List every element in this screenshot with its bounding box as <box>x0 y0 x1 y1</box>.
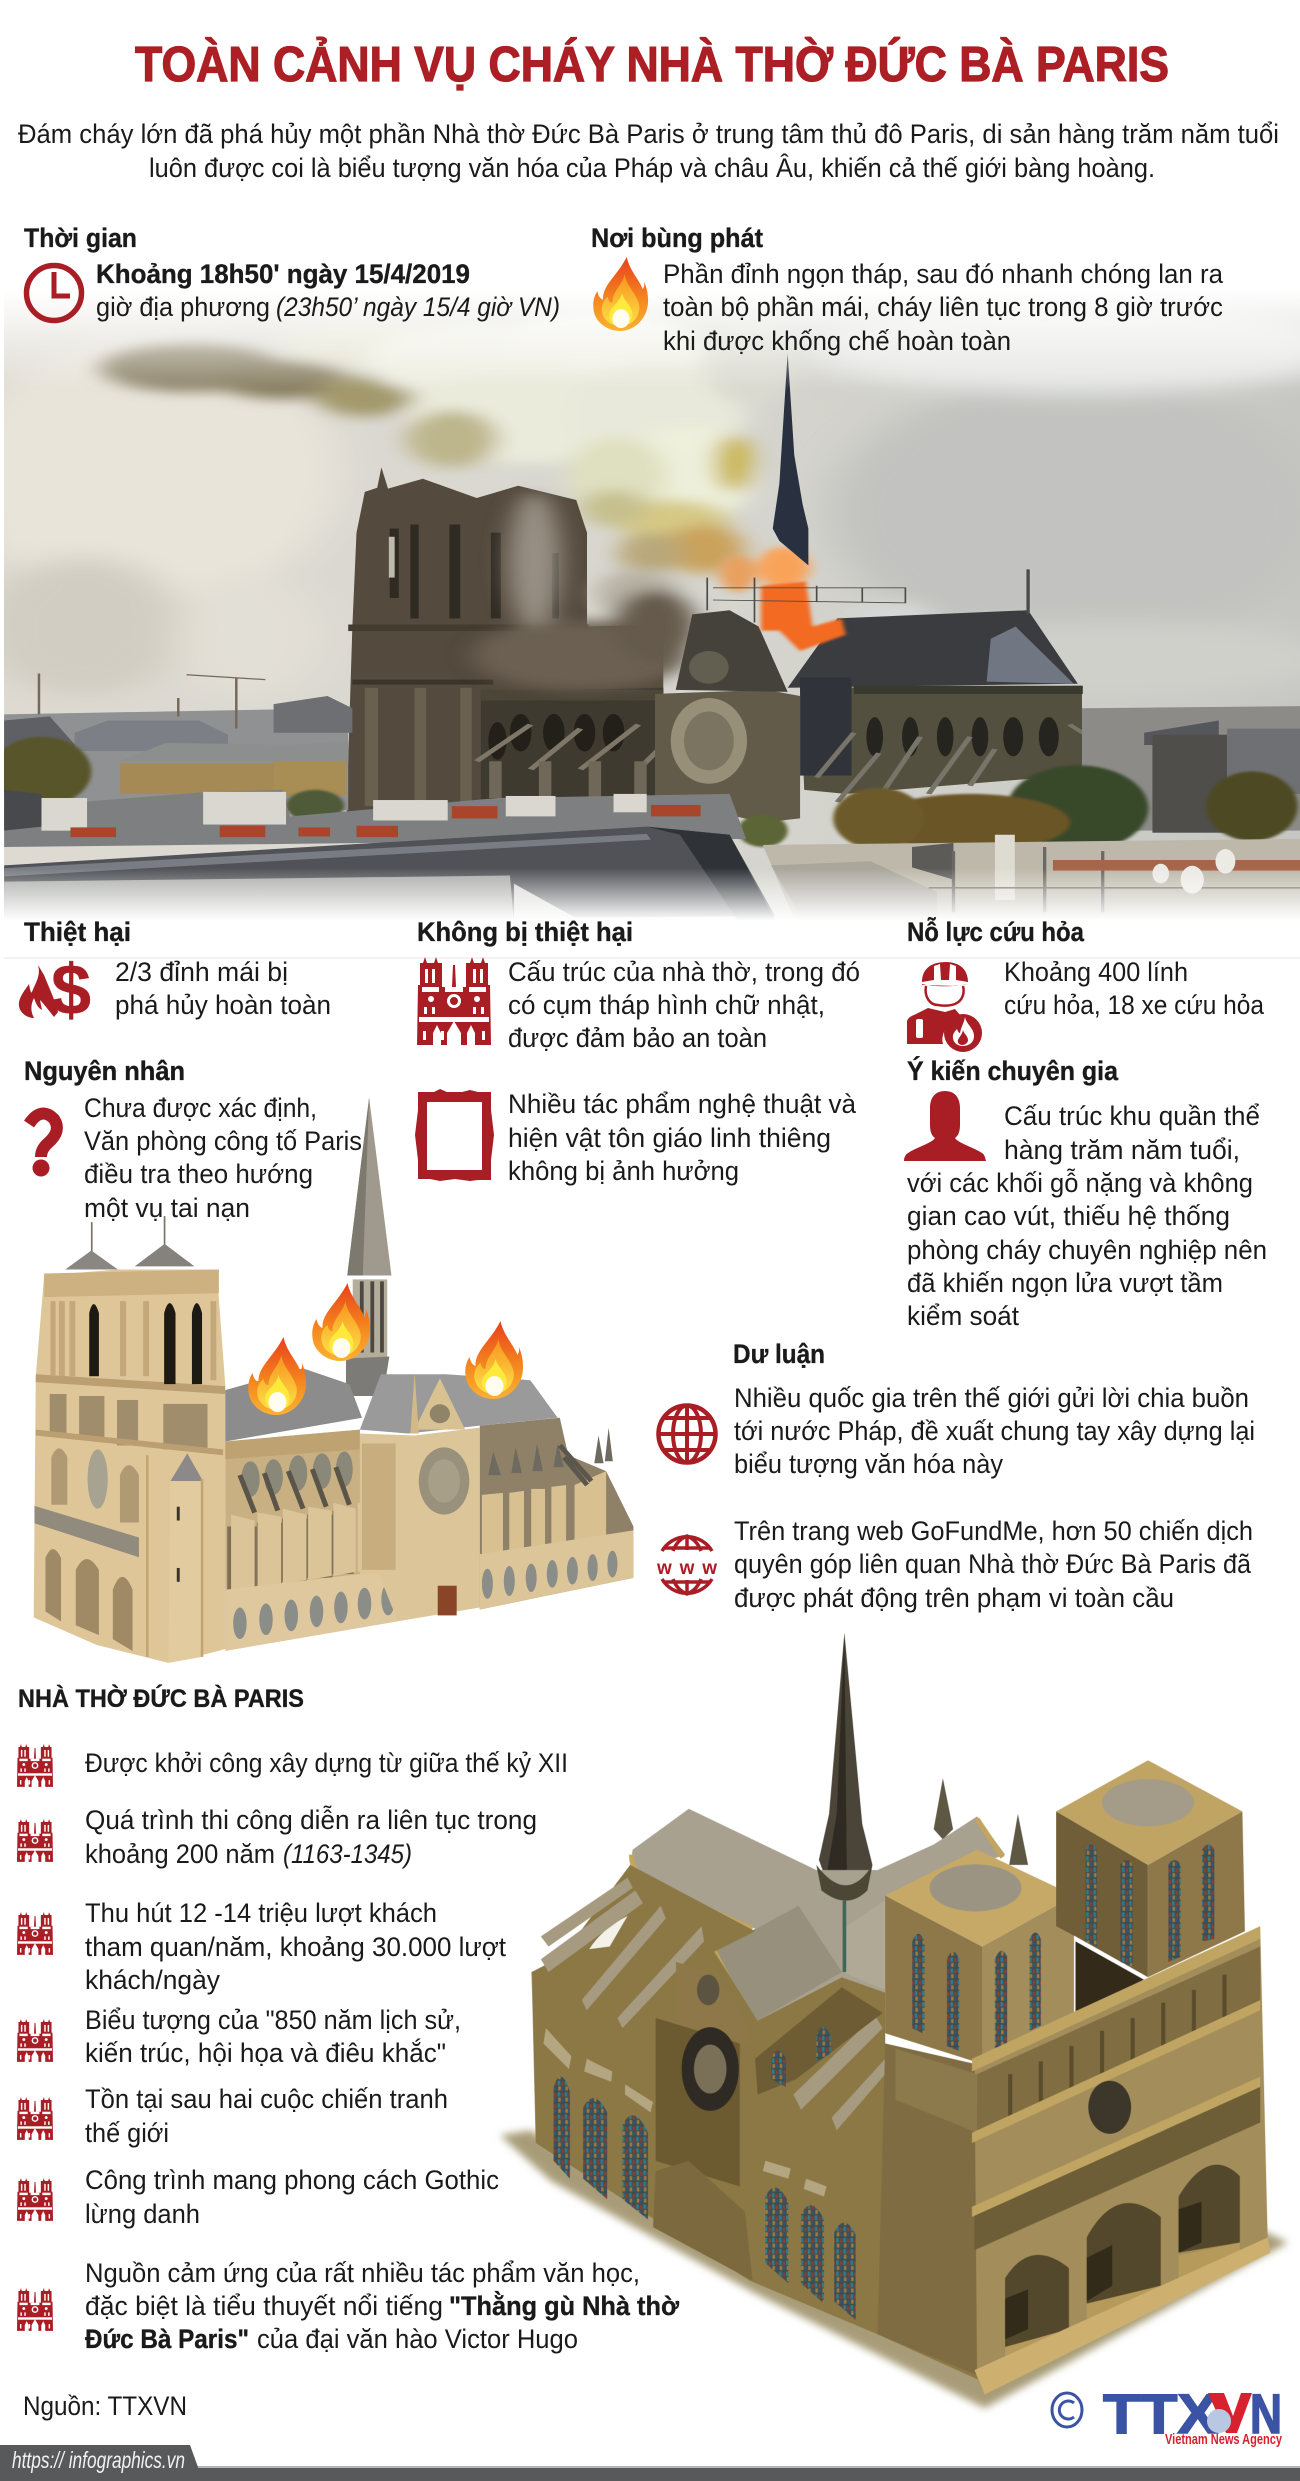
towers <box>347 467 663 812</box>
side walls <box>532 1865 980 2380</box>
fact: inspiration: đặc biệt là tiểu thuyết nổi tiếng <box>85 2291 443 2321</box>
fact: gothic: Công trình mang phong cách Gothic <box>85 2165 499 2195</box>
fact: inspiration: Nguồn cảm ứng của rất nhiều tác phẩm văn học, <box>85 2258 640 2288</box>
panel: public opinion: được phát động trên phạm vi toàn cầu <box>734 1583 1174 1613</box>
roofs <box>630 1809 1005 2021</box>
panel: firefighting <box>907 916 1265 1052</box>
illustration: isometric cathedral <box>500 1633 1288 2408</box>
fact: visitors <box>85 1898 506 1995</box>
panel: expert opinion: Ý kiến chuyên gia <box>907 1055 1119 1086</box>
panel: not damaged <box>417 917 860 1053</box>
panel: expert opinion: phòng cháy chuyên nghiệp nên <box>907 1235 1267 1265</box>
intro text <box>18 119 1279 183</box>
roofs <box>225 1368 362 1441</box>
panel: cause: Nguyên nhân <box>24 1056 185 1086</box>
fact: construction period: (1163-1345) <box>283 1839 412 1869</box>
panel: expert opinion <box>904 1055 1267 1331</box>
panel: damage: phá hủy hoàn toàn <box>115 990 331 1020</box>
panel: damage: Thiệt hại <box>24 917 131 947</box>
panel: expert opinion: gian cao vút, thiếu hệ thống <box>907 1201 1230 1231</box>
fact: visitors: khách/ngày <box>85 1965 220 1995</box>
panel: not damaged: có cụm tháp hình chữ nhật, <box>508 990 825 1020</box>
panel edge shadow <box>4 957 1300 959</box>
fact: construction period <box>85 1804 537 1869</box>
footer bar: https:// infographics.vn <box>12 2447 185 2473</box>
fact: inspiration: "Thằng gù Nhà thờ <box>449 2290 680 2321</box>
fact: construction period: Quá trình thi công diễn ra liên tục trong <box>85 1804 537 1835</box>
panel: expert opinion: kiểm soát <box>907 1301 1019 1331</box>
panel: public opinion: biểu tượng văn hóa này <box>734 1449 1003 1479</box>
logo: TTXVN <box>1052 2382 1282 2448</box>
panel: public opinion: quyên góp liên quan Nhà thờ Đức Bà Paris đã <box>734 1549 1252 1579</box>
fact: symbol <box>85 2005 461 2068</box>
fact: visitors: tham quan/năm, khoảng 30.000 lượt <box>85 1932 506 1962</box>
fact: construction period: khoảng 200 năm <box>85 1839 275 1869</box>
panel: facts heading: NHÀ THỜ ĐỨC BÀ PARIS <box>18 1683 304 1713</box>
footer bar <box>0 2445 1300 2481</box>
panel: outbreak location: Phần đỉnh ngọn tháp, sau đó nhanh chóng lan ra <box>663 259 1224 289</box>
panel: damage: $ <box>51 951 91 1030</box>
logo: TTXVN: N <box>1250 2382 1282 2445</box>
panel: cause: Văn phòng công tố Paris <box>84 1126 362 1156</box>
back tower <box>1056 1811 1148 1977</box>
spire <box>347 1098 391 1275</box>
panel: time <box>24 223 560 322</box>
transept <box>655 690 800 822</box>
fact: inspiration <box>85 2258 680 2354</box>
fact: survived wars <box>85 2084 448 2148</box>
apse <box>480 1418 633 1609</box>
panel: expert opinion: với các khối gỗ nặng và không <box>907 1167 1253 1198</box>
icon: bullet 6 <box>17 2178 53 2221</box>
panel: expert opinion: đã khiến ngọn lửa vượt tầm <box>907 1268 1223 1298</box>
west front <box>974 1929 1268 2390</box>
fact: survived wars: Tồn tại sau hai cuộc chiến tranh <box>85 2084 448 2114</box>
source: Nguồn: TTXVN <box>23 2391 187 2421</box>
transept <box>360 1428 480 1621</box>
panel: not damaged: Cấu trúc của nhà thờ, trong đó <box>508 957 860 987</box>
spire <box>819 1633 872 1896</box>
panel: time: Khoảng 18h50' ngày 15/4/2019 <box>96 259 470 289</box>
panel: public opinion: Nhiều quốc gia trên thế giới gửi lời chia buồn <box>734 1383 1249 1413</box>
icon: bullet 7 <box>17 2288 53 2331</box>
panel: outbreak location <box>591 223 1224 356</box>
panel: artworks: Nhiều tác phẩm nghệ thuật và <box>508 1089 857 1119</box>
panel: artworks <box>415 1089 857 1186</box>
foreground rooftops <box>4 790 746 847</box>
panel: expert opinion: Cấu trúc khu quần thể <box>1004 1101 1260 1131</box>
panel: cause <box>24 1056 362 1223</box>
icon: bullet 5 <box>17 2097 53 2140</box>
flames on the roof <box>248 1337 306 1415</box>
panel: not damaged: Không bị thiệt hại <box>417 917 633 947</box>
panel: outbreak location: toàn bộ phần mái, cháy liên tục trong 8 giờ trước <box>663 292 1223 322</box>
panel: public opinion: www <box>656 1558 717 1579</box>
icon: bullet 3 <box>17 1912 53 1955</box>
photo: Notre-Dame burning <box>0 288 1300 941</box>
panel: cause: một vụ tai nạn <box>84 1193 250 1223</box>
panel: expert opinion: hàng trăm năm tuổi, <box>1004 1135 1240 1165</box>
panel: outbreak location: khi được khống chế hoàn toàn <box>663 326 1011 356</box>
panel: time: (23h50’ ngày 15/4 giờ VN) <box>276 292 560 322</box>
panel: public opinion: Trên trang web GoFundMe, hơn 50 chiến dịch <box>734 1516 1253 1546</box>
scaffold <box>707 578 905 622</box>
fire <box>720 547 810 592</box>
panel: outbreak location: Nơi bùng phát <box>591 223 763 253</box>
fact: gothic: lừng danh <box>85 2199 200 2229</box>
fact: gothic <box>85 2165 499 2229</box>
panel: artworks: hiện vật tôn giáo linh thiêng <box>508 1123 831 1153</box>
front tower <box>885 1896 982 2064</box>
fact: inspiration: của đại văn hào Victor Hugo <box>257 2324 578 2354</box>
flying buttresses <box>541 1878 885 2130</box>
panel: public opinion: tới nước Pháp, đề xuất chung tay xây dựng lại <box>734 1416 1255 1446</box>
fact: symbol: kiến trúc, hội họa và điêu khắc" <box>85 2037 446 2068</box>
panel: cause: điều tra theo hướng <box>84 1159 313 1189</box>
nave <box>225 1430 362 1649</box>
illustration: cathedral with flames <box>34 1098 633 1663</box>
panel: cause: Chưa được xác định, <box>84 1093 317 1123</box>
panel: firefighting: Nỗ lực cứu hỏa <box>907 916 1085 947</box>
fact: start of construction: Được khởi công xây dựng từ giữa thế kỷ XII <box>85 1748 568 1778</box>
panel: public opinion <box>656 1339 1255 1613</box>
panel: damage: 2/3 đỉnh mái bị <box>115 957 288 987</box>
panel: firefighting: cứu hỏa, 18 xe cứu hỏa <box>1004 990 1265 1020</box>
apse <box>788 610 1078 688</box>
distant buildings <box>4 708 348 810</box>
west front <box>34 1270 225 1663</box>
logo: TTXVN: TTX <box>1103 2382 1218 2445</box>
facts list <box>17 1744 680 2354</box>
panel: time: giờ địa phương <box>96 292 270 322</box>
spire <box>773 353 808 565</box>
fact: inspiration: Đức Bà Paris" <box>85 2324 249 2354</box>
panel: firefighting: Khoảng 400 lính <box>1004 957 1188 987</box>
intro text: luôn được coi là biểu tượng văn hóa của Pháp và châu Âu, khiến cả thế giới bàng hoàng. <box>149 152 1155 183</box>
panel: artworks: không bị ảnh hưởng <box>508 1156 739 1186</box>
icon: bullet 2 <box>17 1819 53 1862</box>
panel: damage <box>19 917 331 1030</box>
stained glass windows <box>554 2027 913 2320</box>
fact: visitors: Thu hút 12 -14 triệu lượt khách <box>85 1898 437 1928</box>
icon: bullet 1 <box>17 1744 53 1787</box>
fact: survived wars: thế giới <box>85 2118 169 2148</box>
title: TOÀN CẢNH VỤ CHÁY NHÀ THỜ ĐỨC BÀ PARIS <box>135 37 1169 92</box>
panel: not damaged: được đảm bảo an toàn <box>508 1023 767 1053</box>
panel: time: Thời gian <box>24 223 137 253</box>
icon: bullet 4 <box>17 2019 53 2062</box>
fact: symbol: Biểu tượng của "850 năm lịch sử, <box>85 2005 461 2035</box>
panel: public opinion: Dư luận <box>733 1339 825 1369</box>
